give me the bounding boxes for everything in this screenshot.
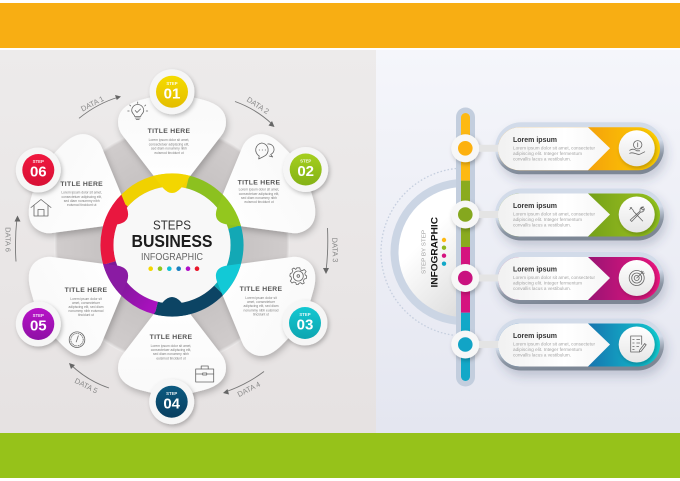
bottom green band bbox=[0, 433, 680, 478]
card 1 text bbox=[513, 135, 595, 161]
text block 01 bbox=[148, 128, 190, 155]
text block 04: Lorem ipsum dolor sit amet, bbox=[151, 344, 191, 348]
arrow: data 4 bbox=[223, 372, 264, 399]
step 01: 01 bbox=[164, 85, 180, 102]
centre colour dots bbox=[148, 266, 199, 271]
text block 01: sed diam nonummy nibh bbox=[151, 147, 187, 151]
text block 01: Lorem ipsum dolor sit amet, bbox=[149, 138, 189, 142]
text block 02: Lorem ipsum dolor sit amet, bbox=[239, 188, 279, 192]
semicircle title bbox=[422, 217, 439, 288]
text block 05: Lorem ipsum dolor sit bbox=[70, 297, 102, 301]
centre title: BUSINESS bbox=[132, 231, 213, 251]
text block 02: euismod tincidunt ut bbox=[244, 200, 274, 204]
semicircle title: STEP BY STEP bbox=[422, 230, 428, 274]
panel: left background bbox=[0, 50, 376, 433]
arrow: data 6 bbox=[4, 216, 20, 262]
top orange band bbox=[0, 3, 680, 48]
text block 03: TITLE HERE bbox=[240, 286, 282, 293]
text block 05 bbox=[65, 287, 107, 317]
card 1 white label bbox=[498, 127, 610, 170]
arrow: data 4: DATA 4 bbox=[236, 380, 262, 399]
text block 05: tincidunt ut bbox=[78, 313, 94, 317]
centre title bbox=[132, 218, 213, 263]
card 2 text bbox=[513, 201, 595, 228]
step 03: 03 bbox=[297, 317, 313, 334]
timeline segments bbox=[461, 113, 470, 381]
card 2 text: convallis lacus a vestibulum. bbox=[513, 222, 571, 228]
text block 01: consectetuer adipiscing elit, bbox=[149, 142, 189, 146]
icon: briefcase bbox=[196, 366, 214, 382]
step 05 bbox=[16, 302, 61, 346]
text block 02: consectetuer adipiscing elit, bbox=[239, 192, 279, 196]
arrow: data 2 bbox=[235, 95, 274, 127]
card 1 text: convallis lacus a vestibulum. bbox=[513, 156, 571, 161]
text block 05: amet, consectetuer bbox=[72, 301, 101, 305]
text block 04: euismod tincidunt ut bbox=[156, 356, 186, 360]
text block 06: Lorem ipsum dolor sit amet, bbox=[61, 190, 102, 194]
card 4 colour pill bbox=[498, 324, 660, 366]
card 3 bbox=[479, 252, 664, 304]
text block 05: TITLE HERE bbox=[65, 287, 107, 294]
text block 06: euismod tincidunt ut bbox=[67, 203, 96, 207]
ring wedges bbox=[103, 174, 241, 316]
card 4 text bbox=[513, 331, 595, 358]
card 3 text: Lorem ipsum bbox=[513, 264, 557, 274]
centre white disc bbox=[114, 186, 230, 304]
text block 04: sed diam nonummy nibh bbox=[153, 352, 189, 356]
icon: crossed tools bbox=[630, 207, 644, 222]
card 2 colour pill bbox=[498, 194, 660, 236]
text block 01: euismod tincidunt ut bbox=[154, 151, 184, 155]
icon: gear bbox=[290, 268, 307, 284]
petal cards bbox=[12, 92, 332, 398]
text block 04 bbox=[150, 334, 192, 360]
step 04: STEP bbox=[166, 391, 177, 396]
card 3 icon disc bbox=[619, 260, 655, 296]
arrow: data 5 bbox=[69, 363, 109, 395]
card 4 frame bbox=[495, 318, 664, 370]
text block 02 bbox=[238, 180, 280, 204]
card 3 frame bbox=[495, 252, 664, 304]
step 05: STEP bbox=[33, 313, 44, 318]
card 1 connector bbox=[479, 145, 503, 152]
arrow: data 1 bbox=[79, 94, 121, 118]
text block 03: nonummy nibh euismod bbox=[243, 308, 279, 312]
step 04: 04 bbox=[163, 395, 181, 412]
card 2 bbox=[479, 188, 664, 240]
text block 03: Lorem ipsum dolor sit bbox=[245, 296, 277, 300]
text block 06: consectetuer adipiscing elit, bbox=[61, 195, 102, 199]
centre title: STEPS bbox=[153, 218, 191, 232]
icon: target bbox=[629, 270, 644, 286]
text block 06: sed diam nonummy nibh bbox=[64, 199, 100, 203]
card 2 icon disc bbox=[619, 196, 655, 232]
card 3 text bbox=[513, 264, 595, 291]
panel: vertical timeline infographic bbox=[381, 108, 664, 386]
icon: house bbox=[31, 200, 51, 216]
card 4 bbox=[479, 318, 664, 370]
step 01: STEP bbox=[166, 81, 178, 86]
card 4 connector bbox=[479, 341, 503, 348]
card 2 frame bbox=[495, 188, 664, 240]
timeline track bbox=[456, 108, 475, 386]
semicircle colour dots bbox=[442, 238, 446, 266]
step 05: 05 bbox=[30, 318, 47, 335]
card 1 bbox=[479, 122, 664, 174]
text block 05: nonummy nibh euismod bbox=[68, 309, 104, 313]
card 4 text: adipiscing elit. Integer fermentum bbox=[513, 347, 582, 352]
card 4 text: Lorem ipsum bbox=[513, 331, 557, 340]
arrow: data 2: DATA 2 bbox=[245, 95, 271, 116]
card 2 connector bbox=[479, 211, 503, 218]
colour ring bbox=[107, 180, 237, 310]
text block 04: consectetuer adipiscing elit, bbox=[151, 348, 191, 352]
card 1 text: adipiscing elit. Integer fermentum bbox=[513, 151, 582, 156]
card 3 text: adipiscing elit. Integer fermentum bbox=[513, 281, 582, 286]
arrow: data 1: DATA 1 bbox=[79, 94, 105, 113]
timeline node 2 bbox=[451, 200, 479, 228]
card 1 text: Lorem ipsum dolor sit amet, consectetur bbox=[513, 145, 595, 150]
card 3 white label bbox=[498, 257, 610, 300]
step 03: STEP bbox=[299, 312, 311, 317]
arrow: data 5: DATA 5 bbox=[73, 376, 99, 395]
text block 04: TITLE HERE bbox=[150, 334, 192, 341]
timeline node 1 bbox=[451, 134, 479, 162]
semicircle title: INFOGRAPHIC bbox=[429, 217, 439, 288]
text block 06 bbox=[60, 181, 103, 207]
card 2 text: Lorem ipsum bbox=[513, 201, 557, 210]
text block 06: TITLE HERE bbox=[60, 181, 103, 188]
card 1 text: Lorem ipsum bbox=[513, 135, 557, 144]
card 2 text: Lorem ipsum dolor sit amet, consectetur bbox=[513, 212, 595, 216]
dotted arc bbox=[380, 168, 456, 336]
text block 01: TITLE HERE bbox=[148, 128, 190, 135]
step 06: 06 bbox=[30, 164, 47, 181]
icon: hand with coin bbox=[630, 141, 645, 154]
timeline node 3 bbox=[451, 264, 479, 292]
card 1 frame bbox=[495, 122, 664, 174]
text block 03: amet, consectetuer bbox=[247, 300, 276, 304]
icon: clock bbox=[69, 332, 85, 348]
card 4 text: Lorem ipsum dolor sit amet, consectetur bbox=[513, 342, 595, 346]
panel: circular six step diagram bbox=[4, 69, 340, 424]
step 06: STEP bbox=[33, 159, 44, 164]
central grey hub bbox=[54, 127, 290, 363]
text block 02: sed diam nonummy nibh bbox=[241, 196, 277, 200]
text block 03: tincidunt ut bbox=[253, 312, 269, 316]
card 3 text: Lorem ipsum dolor sit amet, consectetur bbox=[513, 275, 595, 280]
text block 02: TITLE HERE bbox=[238, 180, 280, 186]
card 3 connector bbox=[479, 274, 503, 282]
step 01 bbox=[150, 69, 194, 114]
arrow: data 3: DATA 3 bbox=[330, 237, 340, 262]
card 4 white label bbox=[498, 324, 610, 366]
card 3 colour pill bbox=[498, 257, 660, 300]
text block 03: adipiscing elit, sed diam bbox=[243, 304, 279, 308]
timeline node 4 bbox=[451, 330, 479, 358]
icon: chat bubbles bbox=[256, 143, 274, 159]
card 1 icon disc bbox=[619, 130, 655, 166]
step 04 bbox=[149, 379, 194, 424]
card 2 text: adipiscing elit. Integer fermentum bbox=[513, 217, 582, 222]
icon: light bulb bbox=[128, 102, 148, 120]
step 02 bbox=[283, 147, 328, 192]
text block 03 bbox=[240, 286, 282, 316]
panel: right background bbox=[376, 50, 680, 433]
centre title: INFOGRAPHIC bbox=[141, 252, 203, 263]
card 4 text: convallis lacus a vestibulum. bbox=[513, 352, 571, 358]
arrow: data 3 bbox=[323, 228, 340, 274]
text block 05: adipiscing elit, sed diam bbox=[68, 305, 104, 309]
semicircle badge bbox=[390, 180, 456, 324]
icon: checklist with pencil bbox=[631, 336, 646, 352]
card 1 colour pill bbox=[498, 127, 660, 170]
step 06 bbox=[16, 148, 61, 192]
step 02: 02 bbox=[297, 163, 314, 180]
card 4 icon disc bbox=[619, 326, 655, 362]
card 3 text: convallis lacus a vestibulum. bbox=[513, 286, 571, 291]
arrow: data 6: DATA 6 bbox=[4, 227, 12, 252]
step 02: STEP bbox=[300, 159, 311, 164]
step 03 bbox=[282, 300, 328, 346]
card 2 white label bbox=[498, 194, 610, 236]
